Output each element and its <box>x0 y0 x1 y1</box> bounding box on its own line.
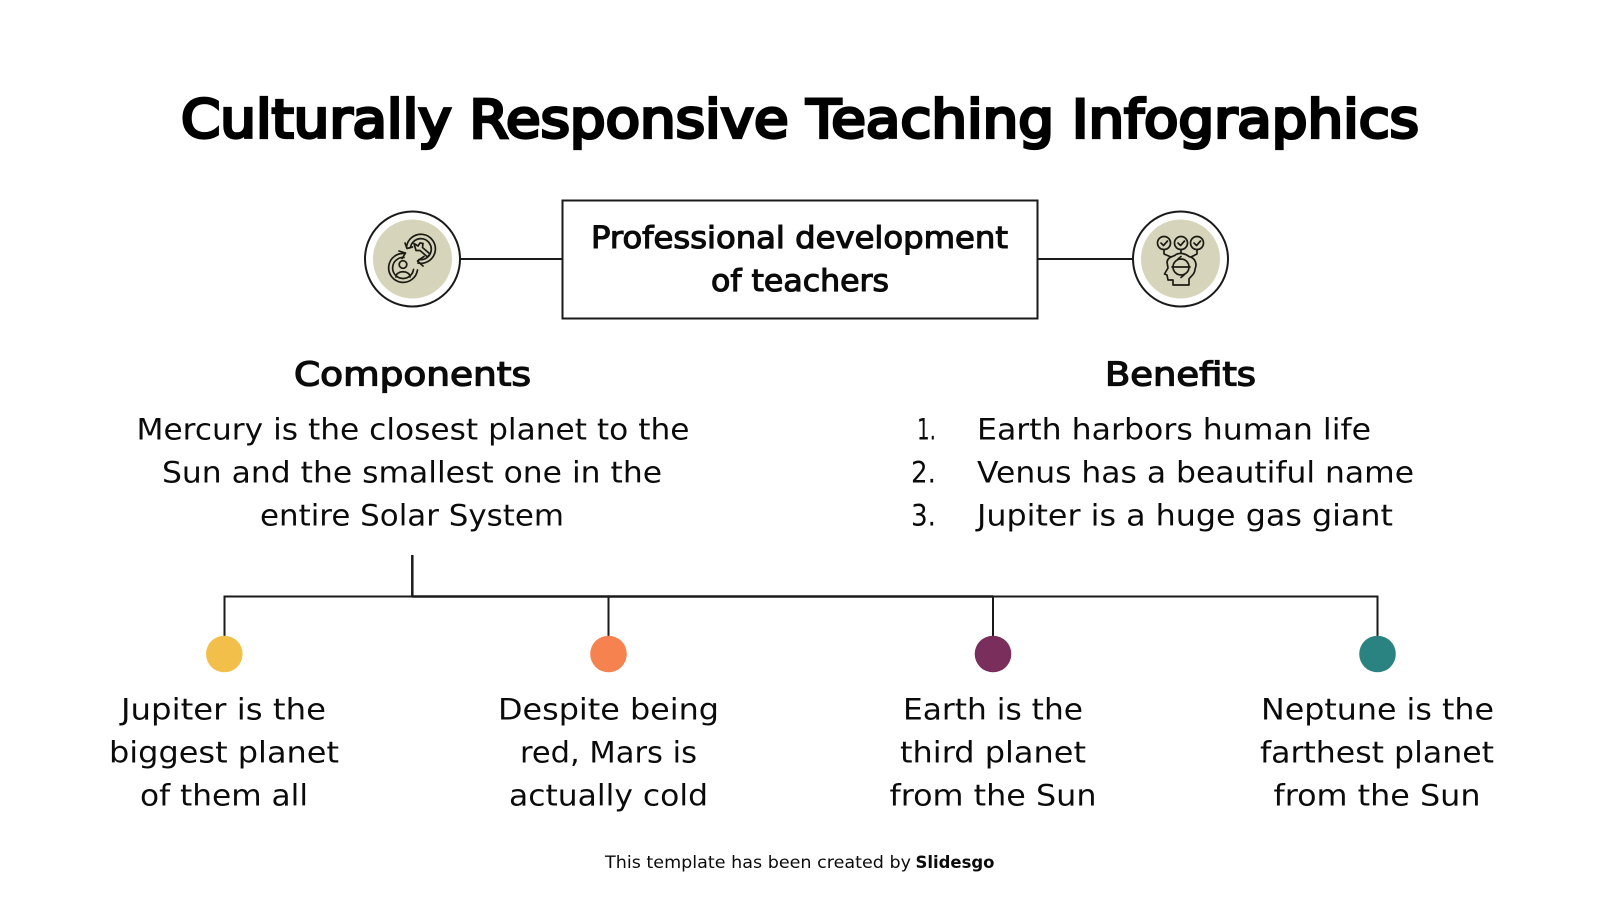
text block: components description: Sun and the smallest one in the <box>162 456 662 490</box>
icon: components, person and wrench cycle <box>365 212 460 306</box>
list: benefits: 3. <box>911 498 936 532</box>
text block: Neptune: from the Sun <box>1274 778 1480 812</box>
text block: Earth: Earth is the <box>903 692 1083 726</box>
footer credit: This template has been created by <box>604 853 911 873</box>
dot: orange <box>590 636 627 672</box>
text block: Jupiter: biggest planet <box>109 736 339 770</box>
text block: components description: Mercury is the closest planet to the <box>136 412 690 446</box>
text block: Earth <box>890 692 1096 812</box>
text block: Mars <box>498 692 719 812</box>
list: benefits: 2. <box>911 456 936 490</box>
text block: Mars: actually cold <box>509 778 708 812</box>
dot: purple <box>975 636 1011 672</box>
dot: teal <box>1359 636 1396 672</box>
heading: benefits: Benefits <box>1105 354 1256 394</box>
text block: Earth: from the Sun <box>890 778 1096 812</box>
center box: professional development: of teachers <box>711 264 889 299</box>
text block: components description: entire Solar System <box>260 498 564 532</box>
text block: Jupiter: of them all <box>140 778 308 812</box>
title: Culturally Responsive Teaching Infographics <box>181 90 1419 150</box>
heading: components: Components <box>294 354 531 394</box>
dot: yellow <box>206 636 243 672</box>
connector: center box to right circle <box>1038 258 1132 260</box>
tree connector <box>224 555 1378 636</box>
text block: Earth: third planet <box>900 736 1086 770</box>
icon: benefits, checks and head <box>1133 212 1228 306</box>
list: benefits: Earth harbors human life <box>977 412 1371 446</box>
text block: Mars: Despite being <box>498 692 719 726</box>
list: benefits <box>911 412 1414 532</box>
text block: Jupiter <box>109 692 339 812</box>
footer credit: Slidesgo <box>916 853 994 873</box>
list: benefits: Venus has a beautiful name <box>977 456 1414 490</box>
list: benefits: Jupiter is a huge gas giant <box>975 498 1393 532</box>
text block: Neptune <box>1260 692 1494 812</box>
text block: Jupiter: Jupiter is the <box>119 692 326 726</box>
text block: Mars: red, Mars is <box>520 736 697 770</box>
center box: professional development <box>562 200 1038 318</box>
text block: components description <box>136 412 690 532</box>
text block: Neptune: farthest planet <box>1260 736 1494 770</box>
connector: left circle to center box <box>460 258 562 260</box>
list: benefits: 1. <box>917 412 936 446</box>
text block: Neptune: Neptune is the <box>1261 692 1494 726</box>
center box: professional development: Professional development <box>591 221 1008 256</box>
